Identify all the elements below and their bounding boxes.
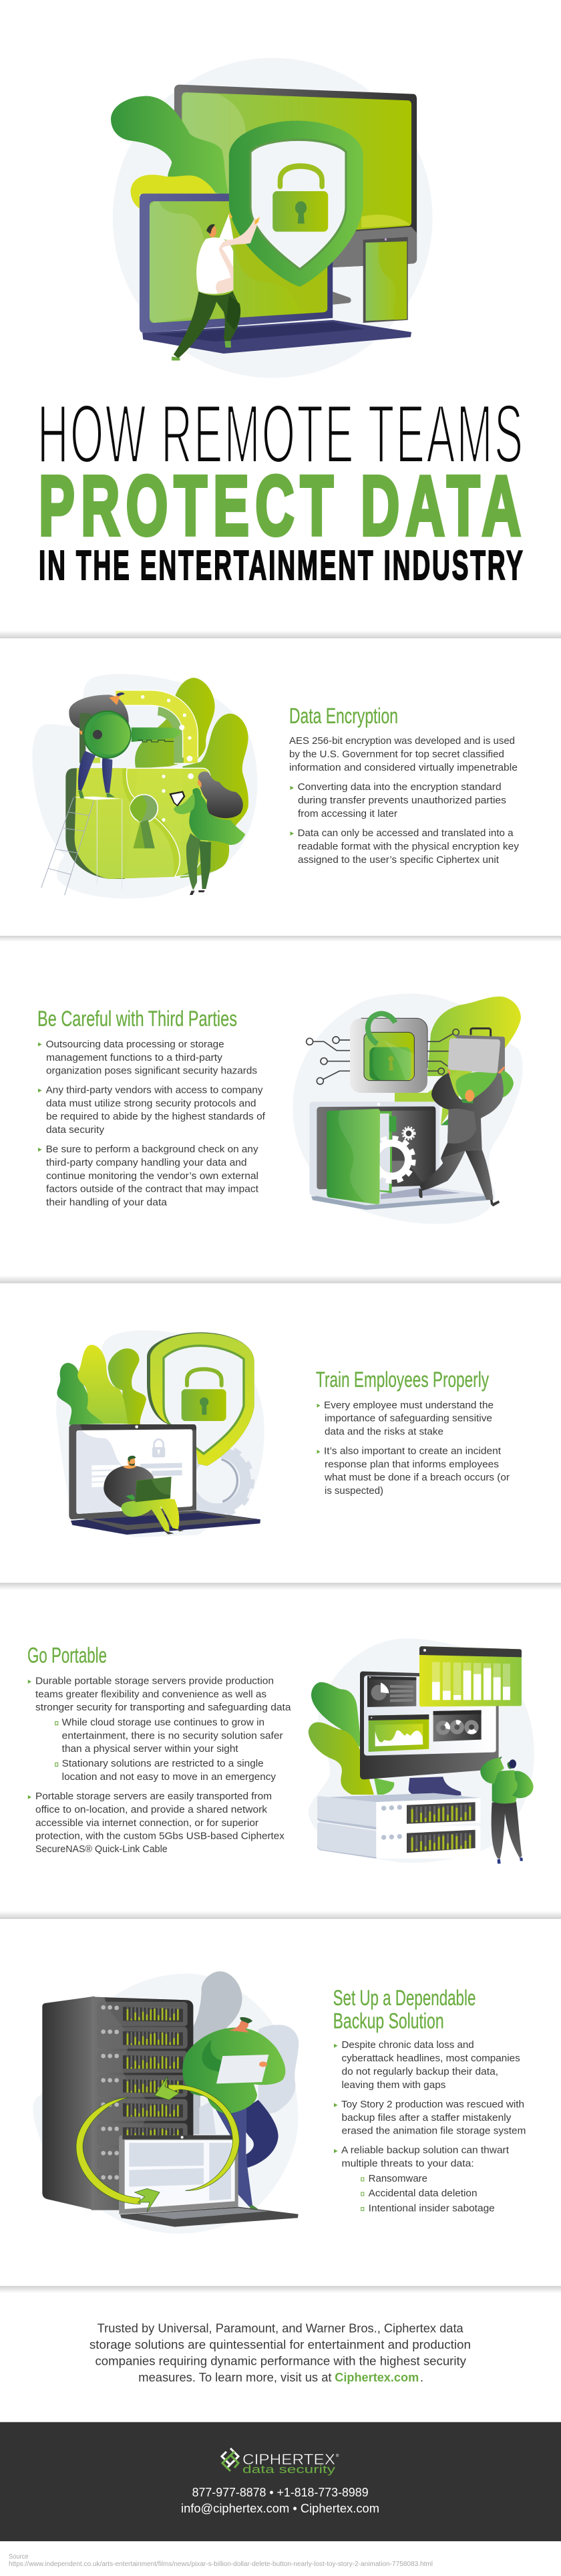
bullet list: Toy Story 2 production was rescued with [341,2099,524,2110]
chip with open padlock [350,1014,427,1093]
footer band [0,2422,561,2541]
bullet list: protection, with the custom 5Gbs USB-based Ciphertex [35,1831,285,1842]
bullet list: continue monitoring the vendor’s own external [46,1171,258,1182]
illustration: safe and chip [293,994,523,1224]
closing statement [89,2322,471,2384]
bullet list: accessible via internet connection, or for superior [35,1818,258,1829]
yellow leaf [131,174,216,209]
bullet list: data and the risks at stake [325,1426,443,1437]
person pushing shield [172,211,260,360]
laptop [119,2136,299,2227]
bullet list: multiple threats to your data: [342,2159,474,2170]
closing statement: . [420,2371,423,2384]
illustration: monitor and servers [309,1638,534,1863]
source note: https://www.independent.co.uk/arts-entertainment/films/news/pixar-s-billion-dollar-delete-button-nearly-lost-toy-story-2-animation-7758083.html [9,2561,433,2568]
background leaves [192,1971,299,2134]
bar chart window [419,1646,522,1706]
rack slots [97,2002,188,2194]
closing statement: companies requiring dynamic performance with the highest security [95,2354,466,2367]
panel: data encryption [32,674,520,898]
tablet [363,237,408,323]
heading [333,1986,476,2033]
hero illustration: devices and shield [111,58,433,378]
bullet list: Be sure to perform a background check on any [46,1144,258,1155]
leaves [57,1345,146,1425]
bullet list [38,1039,266,1208]
logo tagline: data security [242,2463,336,2476]
bullet list: from accessing it later [298,809,397,819]
man with tablet [182,2017,285,2209]
closing statement: storage solutions are quintessential for entertainment and production [89,2338,471,2351]
laptop [69,1424,260,1535]
laptop safe [309,1102,493,1210]
bullet list: teams greater flexibility and convenience as well as [35,1689,266,1700]
intro text: by the U.S. Government for top secret classified [289,749,504,760]
bullet list: office to on-location, and provide a shared network [35,1805,268,1815]
man pointing at screen [480,1757,534,1863]
bullet list: third-party company handling your data and [46,1158,247,1168]
bullet list: Accidental data deletion [369,2188,477,2199]
white dots [141,695,194,821]
bullet list [317,1400,510,1497]
desktop monitor [174,85,417,305]
source note: Source [9,2553,29,2561]
panel: third parties [37,994,523,1224]
running man with briefcase [419,1066,505,1206]
gear [184,1447,250,1514]
bullet list: is suspected) [325,1486,383,1497]
bullet list: readable format with the physical encryption key [298,842,520,852]
heading: Data Encryption [289,704,398,728]
illustration: employee on laptop [56,1330,264,1537]
bullet list: Every employee must understand the [324,1400,494,1411]
bullet list: importance of safeguarding sensitive [325,1414,492,1424]
logo: ® [336,2454,339,2458]
bullet list: Portable storage servers are easily transported from [35,1791,272,1802]
bullet list: data must utilize strong security protocols and [46,1098,256,1109]
server stack [317,1793,480,1859]
source note [9,2553,433,2568]
intro text [289,736,518,773]
heading: Go Portable [27,1644,107,1668]
hero background circle [113,58,433,378]
bullet list: It’s also important to create an incident [324,1446,501,1457]
bullet list: Durable portable storage servers provide production [35,1676,274,1687]
bullet list: entertainment, there is no security solution safer [62,1730,283,1741]
bullet list: their handling of your data [46,1197,168,1208]
bullet list [28,1676,291,1855]
bullet list: be required to abide by the highest standards of [46,1112,266,1122]
shield with padlock [229,121,363,287]
panel: train employees [56,1330,510,1537]
padlock body [65,768,210,879]
area chart window [369,1714,429,1752]
donut chart window [433,1710,482,1742]
panel: backup solution [33,1971,526,2234]
bullet list: backup files after a staffer mistakenly [342,2113,512,2123]
bullet list: A reliable backup solution can thwart [341,2146,509,2156]
intro text: information and considered virtually impenetrable [289,763,518,773]
bullet list: Intentional insider sabotage [369,2203,495,2214]
contact lines [181,2486,379,2515]
section shadows [0,630,561,2293]
intro text: AES 256-bit encryption was developed and is used [289,736,515,747]
contact lines: info@ciphertex.com • Ciphertex.com [181,2502,379,2515]
padlock shackle [79,698,198,763]
keyhole [130,795,158,848]
illustration: padlock and key [32,674,257,898]
laptop [140,194,411,354]
large green leaf [111,96,229,197]
closing statement: Trusted by Universal, Paramount, and Warner Bros., Ciphertex data [98,2322,464,2335]
bullet list: erased the animation file storage system [342,2126,526,2137]
bullet list: Despite chronic data loss and [342,2040,474,2051]
bullet list: Ransomware [369,2174,427,2184]
logo icon [222,2448,238,2471]
bullet list: response plan that informs employees [325,1459,499,1470]
logo wordmark: CIPHERTEX [242,2451,335,2468]
woman with clipboard [169,771,245,895]
monitor [360,1672,499,1797]
briefcase [448,1029,505,1073]
closing statement: Ciphertex.com [335,2371,419,2384]
heading: Be Careful with Third Parties [37,1007,237,1031]
bullet list: stronger security for transporting and safeguarding data [35,1702,291,1713]
background blob [32,674,257,898]
bullet list: Data can only be accessed and translated into a [298,828,514,839]
bullet list [290,782,520,866]
closing statement: measures. To learn more, visit us at [138,2371,332,2384]
bullet list: than a physical server within your sight [62,1744,238,1755]
bullet list: do not regularly backup their data, [342,2067,498,2077]
leaves [395,997,521,1125]
logo [222,2448,339,2476]
heading: Backup Solution [333,2009,444,2033]
leaves [309,1682,394,1795]
illustration: server rack and laptop [33,1971,299,2234]
server tower [42,1997,193,2210]
bullet list: Converting data into the encryption standard [298,782,502,793]
title line 2: PROTECT DATA [39,459,521,553]
background blob [293,994,523,1224]
bullet list: Outsourcing data processing or storage [46,1039,224,1050]
contact lines: 877-977-8878 • +1-818-773-8989 [192,2486,369,2499]
panel: go portable [27,1638,534,1863]
bullet list: Stationary solutions are restricted to a single [62,1759,264,1769]
background blob [309,1638,534,1863]
heading: Train Employees Properly [316,1368,490,1392]
bullet list: what must be done if a breach occurs (or [324,1472,510,1483]
ladder and platform [41,797,122,895]
circuit lines [307,1029,459,1084]
bullet list [334,2040,526,2214]
bullet list: during transfer prevents unauthorized parties [298,795,506,806]
bullet list: While cloud storage use continues to grow in [62,1718,264,1728]
title [37,388,523,588]
bullet list: leaving them with gaps [342,2080,445,2091]
title line 3: IN THE ENTERTAINMENT INDUSTRY [39,542,523,588]
bullet list: location and not easy to move in an emergency [62,1772,276,1783]
bullet list: Any third-party vendors with access to company [46,1085,263,1096]
bullet list: data security [46,1125,105,1136]
bullet list: factors outside of the contract that may impact [46,1184,258,1195]
bullet list: SecureNAS® Quick-Link Cable [35,1844,168,1855]
man holding key [69,692,181,798]
background blob [56,1330,264,1537]
background blob [33,1974,299,2234]
title line 1: HOW REMOTE TEAMS [37,388,523,480]
man with laptop [104,1456,184,1535]
bullet list: management functions to a third-party [46,1053,223,1063]
bullet list: assigned to the user’s specific Ciphertex unit [298,855,499,866]
bullet list: cyberattack headlines, most companies [342,2053,520,2064]
pie chart window [367,1676,416,1707]
heading: Set Up a Dependable [333,1986,476,2010]
circular sync arrows [76,2076,239,2212]
shield with padlock [147,1332,254,1466]
bullet list: organization poses significant security hazards [46,1066,257,1077]
leaves [135,678,248,878]
